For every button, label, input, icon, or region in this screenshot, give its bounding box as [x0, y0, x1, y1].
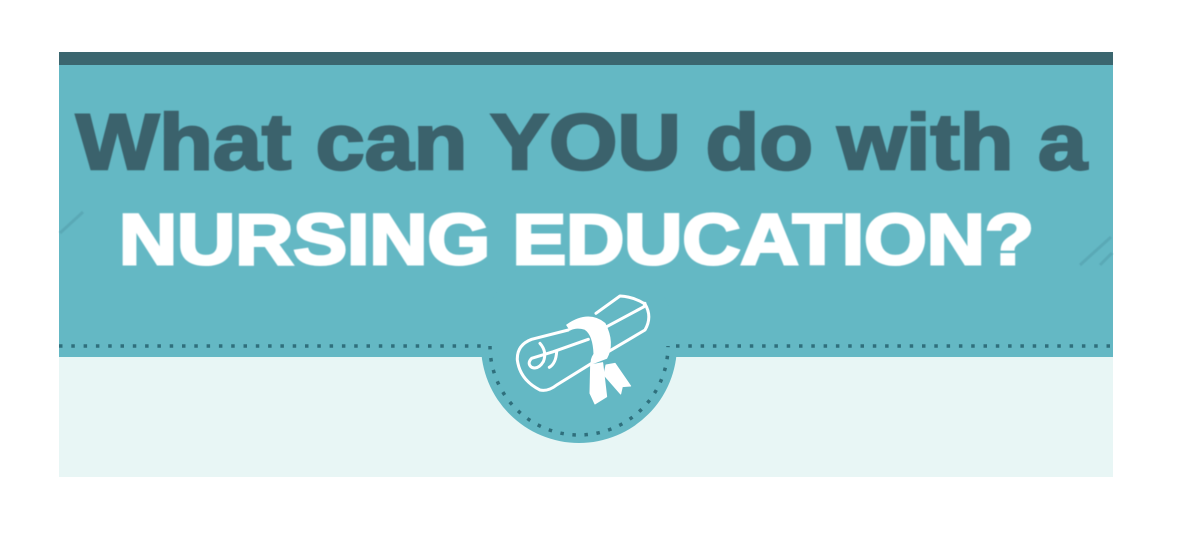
semicircle badge	[481, 247, 677, 443]
title line 1: What can YOU do with a	[76, 97, 1088, 186]
panel: pale lower section	[59, 357, 1113, 477]
title line 2: NURSING EDUCATION?	[119, 201, 1034, 280]
panel: teal banner	[59, 52, 1113, 357]
top dark bar	[59, 52, 1113, 65]
icon: diploma scroll	[517, 296, 649, 404]
